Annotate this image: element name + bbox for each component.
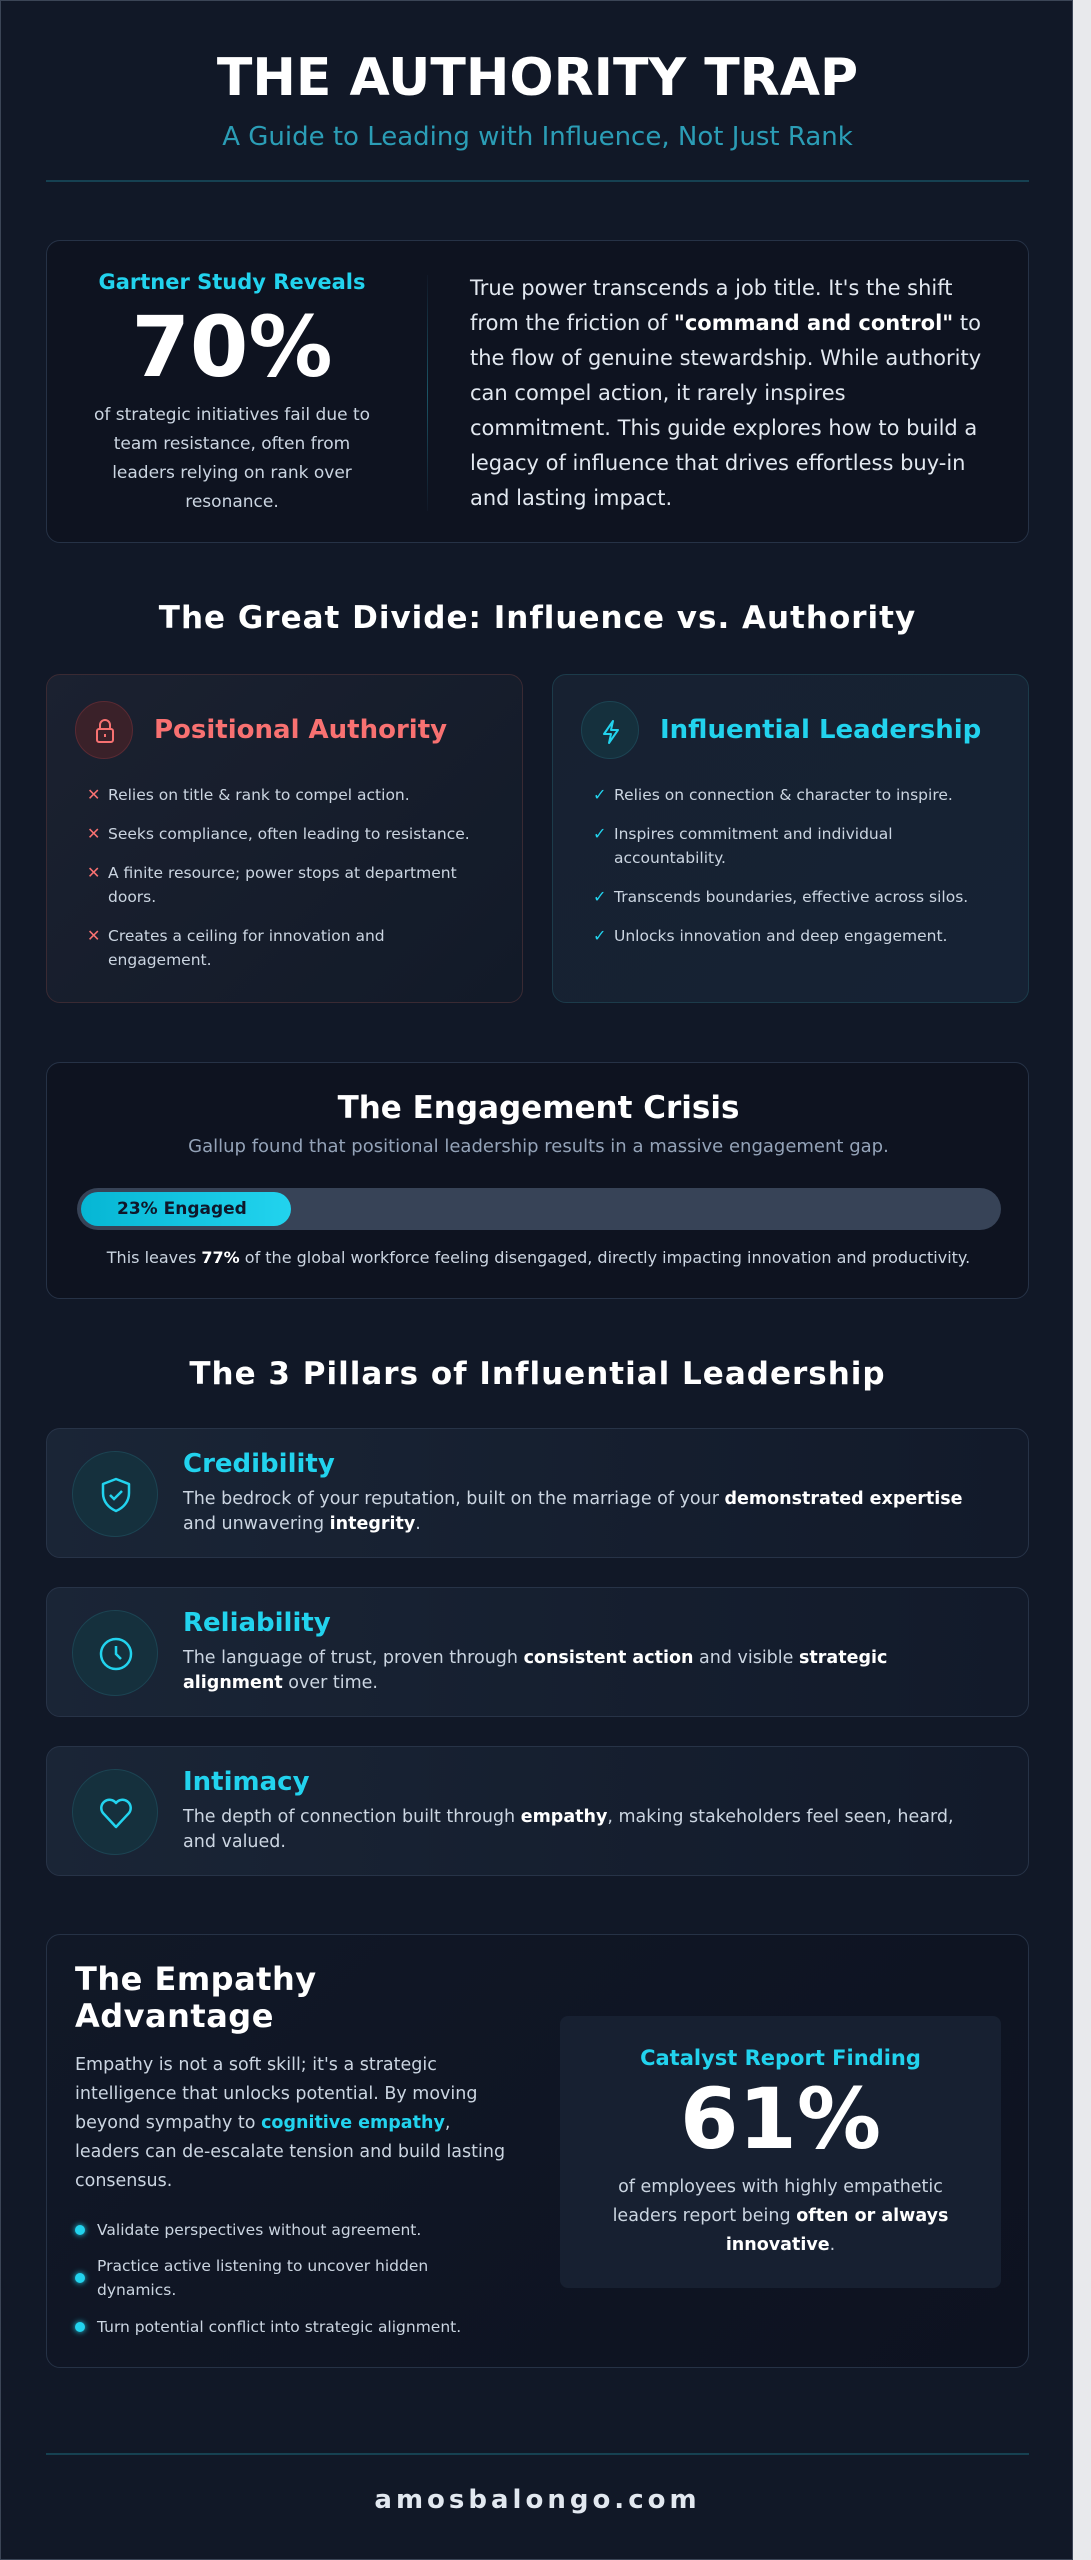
panel: reliability: The language of trust, proven through consistent action and visible strategic alignment over time. xyxy=(183,1648,887,1693)
icon: lock xyxy=(75,701,133,759)
panel: empathy advantage xyxy=(46,1934,1029,2368)
list: Unlocks innovation and deep engagement. xyxy=(614,927,948,945)
stat: gartner 70%: of strategic initiatives fail due to team resistance, often from leaders relying on rank over resonance. xyxy=(94,405,370,512)
panel: positional authority: ✕ xyxy=(87,863,100,882)
panel: influential leadership: ✓ xyxy=(593,887,606,906)
subtitle: Gallup found that positional leadership results in a massive engagement gap. xyxy=(188,1136,889,1157)
list xyxy=(87,785,470,969)
stat: catalyst 61%: Catalyst Report Finding xyxy=(640,2046,921,2070)
panel: reliability xyxy=(46,1587,1029,1717)
list: Transcends boundaries, effective across silos. xyxy=(614,888,968,906)
panel: influential leadership xyxy=(552,674,1029,1003)
list: Inspires commitment and individual accountability. xyxy=(614,825,893,867)
heading: Positional Authority xyxy=(154,715,447,745)
stat: gartner 70%: Gartner Study Reveals xyxy=(98,270,366,294)
stat: catalyst 61%: 61% xyxy=(680,2070,881,2168)
panel: positional authority: ✕ xyxy=(87,785,100,804)
bullet list: Validate perspectives without agreement. xyxy=(97,2221,421,2239)
heading: Influential Leadership xyxy=(660,715,981,745)
caption: This leaves 77% of the global workforce feeling disengaged, directly impacting innovation and productivity. xyxy=(107,1248,970,1267)
list: A finite resource; power stops at department doors. xyxy=(108,864,457,906)
panel: engagement crisis xyxy=(46,1062,1029,1299)
heading: great divide: The Great Divide: Influence vs. Authority xyxy=(159,600,916,636)
heading: The Empathy Advantage xyxy=(75,1960,317,2035)
panel: influential leadership: ✓ xyxy=(593,785,606,804)
stat: catalyst 61%: of employees with highly empathetic leaders report being often or always innovative. xyxy=(613,2177,948,2255)
panel: positional authority: ✕ xyxy=(87,926,100,945)
panel: intro xyxy=(46,240,1029,543)
stat: gartner 70%: 70% xyxy=(131,298,333,396)
list xyxy=(593,785,968,945)
panel: credibility xyxy=(46,1428,1029,1558)
bullet list: Practice active listening to uncover hidden dynamics. xyxy=(97,2257,428,2299)
list: Relies on connection & character to inspire. xyxy=(614,786,953,804)
panel: credibility: Credibility xyxy=(183,1449,335,1479)
panel: credibility: The bedrock of your reputation, built on the marriage of your demonstrated expertise and unwavering integrity. xyxy=(183,1489,963,1534)
subtitle: A Guide to Leading with Influence, Not Just Rank xyxy=(222,122,853,152)
stat: gartner 70% xyxy=(94,270,370,512)
panel: influential leadership: ✓ xyxy=(593,926,606,945)
stat: catalyst 61% xyxy=(560,2016,1001,2288)
panel: influential leadership: ✓ xyxy=(593,824,606,843)
icon: clock xyxy=(72,1610,158,1696)
bar chart xyxy=(77,1188,1001,1230)
heading: The Engagement Crisis xyxy=(338,1090,739,1126)
title: THE AUTHORITY TRAP xyxy=(217,48,858,108)
intro text: True power transcends a job title. It's the shift from the friction of "command and control" to the flow of genuine stewardship. While authority can compel action, it rarely inspires commitment. This guide explores how to build a legacy of influence that drives effortless buy-in and lasting impact. xyxy=(470,276,981,510)
list: Creates a ceiling for innovation and engagement. xyxy=(108,927,385,969)
bullet list xyxy=(71,2221,461,2336)
icon: shield xyxy=(72,1451,158,1537)
panel: reliability: Reliability xyxy=(183,1608,331,1638)
panel: positional authority xyxy=(46,674,523,1003)
panel: intimacy: Intimacy xyxy=(183,1767,310,1797)
list: Seeks compliance, often leading to resistance. xyxy=(108,825,470,843)
text: Empathy is not a soft skill; it's a strategic intelligence that unlocks potential. By moving beyond sympathy to cognitive empathy, leaders can de-escalate tension and build lasting consensus. xyxy=(75,2055,505,2191)
icon: bolt xyxy=(581,701,639,759)
heading: pillars: The 3 Pillars of Influential Leadership xyxy=(189,1356,886,1392)
panel: intimacy xyxy=(46,1746,1029,1876)
bullet list: Turn potential conflict into strategic alignment. xyxy=(97,2318,461,2336)
bar chart: 23% Engaged xyxy=(117,1199,247,1219)
footer: amosbalongo.com xyxy=(374,2485,701,2515)
list: Relies on title & rank to compel action. xyxy=(108,786,410,804)
panel: positional authority: ✕ xyxy=(87,824,100,843)
panel: intimacy: The depth of connection built through empathy, making stakeholders feel seen, heard, and valued. xyxy=(183,1807,954,1852)
icon: heart xyxy=(72,1769,158,1855)
